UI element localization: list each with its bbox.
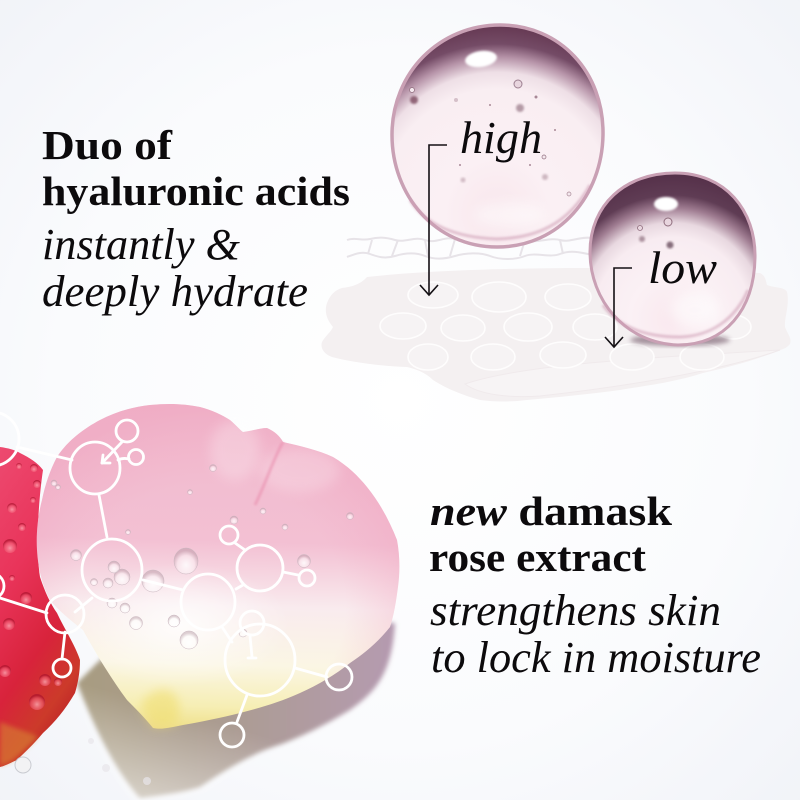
subheading: strengthens skin to lock in moisture: [430, 586, 761, 682]
molecule diagram: [0, 412, 352, 747]
water drops on red petal: [0, 463, 62, 710]
heading: new damask rose extract: [429, 488, 672, 580]
yellow petal base: [140, 690, 180, 727]
droplet body: [590, 173, 755, 345]
droplet bubbles: [638, 218, 674, 248]
subheading: strengthens skin to lock in moisture: to lock in moisture: [431, 633, 761, 682]
label: low: low: [648, 242, 717, 293]
heading: hyaluronic acids: Duo of: [42, 122, 173, 168]
skin illustration: [321, 238, 791, 402]
lower tissue fold: [465, 350, 780, 397]
droplet: high molecular weight: [392, 25, 603, 247]
subheading: instantly and deeply hydrate: deeply hydrate: [42, 267, 308, 316]
epidermis wavy layer: [347, 238, 592, 259]
arrow: high: [420, 145, 447, 295]
water drops on pink petal: [51, 464, 354, 649]
droplet highlight: [654, 197, 678, 211]
heading: new damask rose extract: new damask: [430, 488, 672, 534]
drop below red petal: [15, 757, 31, 773]
droplet bubbles: [410, 80, 571, 196]
skin tissue layer: [321, 268, 791, 402]
heading: new damask rose extract: rose extract: [429, 534, 646, 580]
droplet body: [392, 25, 603, 247]
petal cast shadow: [70, 620, 395, 800]
red rose petal: [0, 447, 80, 773]
faded drops on shadow: [88, 738, 151, 785]
tissue cells: [380, 282, 751, 370]
subheading: instantly and deeply hydrate: instantly &: [42, 220, 241, 269]
subheading: instantly and deeply hydrate: [42, 220, 308, 316]
heading: hyaluronic acids: hyaluronic acids: [42, 168, 350, 214]
molecule bonds: [0, 442, 327, 722]
droplet: low molecular weight: [590, 173, 755, 346]
droplet shadow: [630, 334, 730, 346]
droplet highlight: [464, 49, 498, 69]
pink rose petal: [37, 404, 399, 785]
subheading: strengthens skin to lock in moisture: strengthens skin: [430, 586, 721, 635]
molecule atoms: [0, 412, 352, 747]
petal crease: [255, 442, 283, 505]
heading: hyaluronic acids: [42, 122, 350, 214]
label: high: high: [460, 112, 542, 163]
arrow: low: [605, 268, 632, 347]
